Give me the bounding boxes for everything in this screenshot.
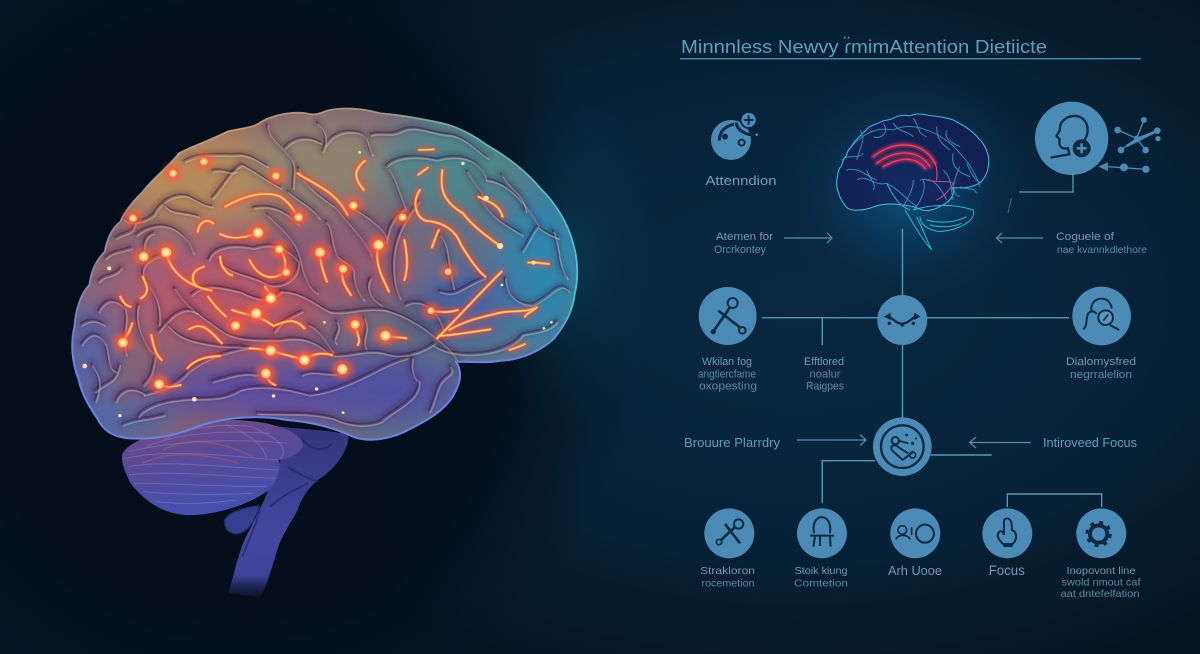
cerebellum body — [122, 420, 303, 515]
label: aat dntefelfation: aat dntefelfation — [1060, 588, 1140, 600]
heads and magnifier icon — [1072, 287, 1131, 345]
arrow left to small brain — [996, 233, 1043, 243]
small brain stem and cerebellum — [887, 183, 974, 250]
teal glow beside large brain — [480, 90, 660, 430]
cool nodes — [82, 151, 553, 417]
brain stem crease — [243, 437, 332, 557]
large glowing brain — [71, 108, 578, 598]
arrow right to small brain — [784, 233, 832, 243]
label: negrralelion: negrralelion — [1070, 369, 1132, 381]
network nodes icon — [1100, 118, 1160, 172]
glowing nodes — [119, 159, 451, 388]
bottom icon: person arch — [797, 508, 847, 558]
label: strakloron: Strakloron — [700, 565, 755, 577]
focus hub icon — [873, 417, 932, 476]
soft fold shading — [81, 122, 568, 424]
label: angtiercfame: angtiercfame — [698, 368, 756, 380]
small tick — [1008, 198, 1012, 213]
bottom icon: person and circle — [890, 508, 940, 558]
label: dialomysfred: Dialomysfred — [1066, 356, 1136, 368]
label: efftlored: Efftlored — [804, 356, 844, 368]
central hub icon — [877, 295, 927, 345]
cerebellum folds — [125, 424, 287, 503]
cerebrum rim light — [72, 108, 577, 440]
label: noalur: noalur — [810, 368, 841, 380]
arrow to focus hub — [797, 434, 866, 446]
label: stoik kiung: Stoik kiung — [794, 565, 848, 577]
cerebellum — [122, 420, 303, 515]
title: Minnnless Newvy ɾ̈mimAttention Dietiicte — [681, 37, 1047, 57]
horizontal connector left — [762, 318, 878, 345]
title rule — [680, 58, 1141, 59]
small brain highlighted arcs — [873, 145, 953, 200]
label: focus: Focus — [989, 562, 1025, 578]
label: oxopesting: oxopesting — [699, 380, 757, 392]
label: atemen for: Atemen for — [716, 231, 773, 243]
label: coguele of: Coguele of — [1056, 231, 1115, 243]
label: swold nmout caf: swold nmout caf — [1062, 576, 1141, 588]
brain stem — [229, 427, 349, 598]
cerebrum lower rim — [72, 108, 577, 440]
label: rocemetion: rocemetion — [702, 578, 755, 590]
small brain glow — [773, 65, 1043, 315]
label: nae kvannkdlethore: nae kvannkdlethore — [1057, 244, 1147, 256]
cerebrum colour field — [73, 108, 577, 439]
bracket joining focus icons — [1007, 494, 1102, 507]
label: raigpes: Raigpes — [806, 380, 844, 392]
tools icon — [699, 287, 757, 345]
dark field behind large brain — [0, 0, 640, 654]
central vertical connector — [902, 229, 904, 422]
label: orcrkontey: Orcrkontey — [714, 244, 766, 256]
attention icon — [711, 112, 758, 160]
label: attention: Attenndion — [706, 174, 777, 188]
label: wkilan fog: Wkilan fog — [702, 356, 752, 368]
bottom icon: hand — [982, 508, 1032, 558]
label: comtetion: Comtetion — [794, 578, 848, 590]
horizontal connector right — [927, 317, 1069, 319]
connector from head icon — [1019, 173, 1073, 192]
glowing neural pathways — [120, 149, 549, 387]
label: brouure plarrdry: Brouure Plarrdry — [684, 436, 781, 450]
connector to second bottom icon — [822, 461, 875, 503]
small brain outline — [837, 114, 989, 210]
label: arh uooe: Arh Uooe — [888, 563, 942, 578]
label: improved focus: Intiroveed Focus — [1043, 436, 1137, 450]
arrow from improved focus — [970, 437, 1031, 448]
small brain veins — [842, 118, 982, 210]
bottom icon: tools — [704, 508, 754, 558]
gyri highlights — [82, 124, 570, 426]
lower lobule — [224, 506, 259, 534]
connector right of focus hub — [931, 454, 992, 456]
cerebrum — [71, 108, 578, 441]
label: inopovont line: Inopovont line — [1066, 565, 1136, 577]
bottom icon: gear — [1076, 508, 1126, 558]
sulci shadows — [81, 122, 568, 424]
head with shield icon — [1035, 102, 1108, 175]
small neural brain — [837, 114, 989, 250]
cerebellum warm fold highlights — [143, 442, 253, 463]
